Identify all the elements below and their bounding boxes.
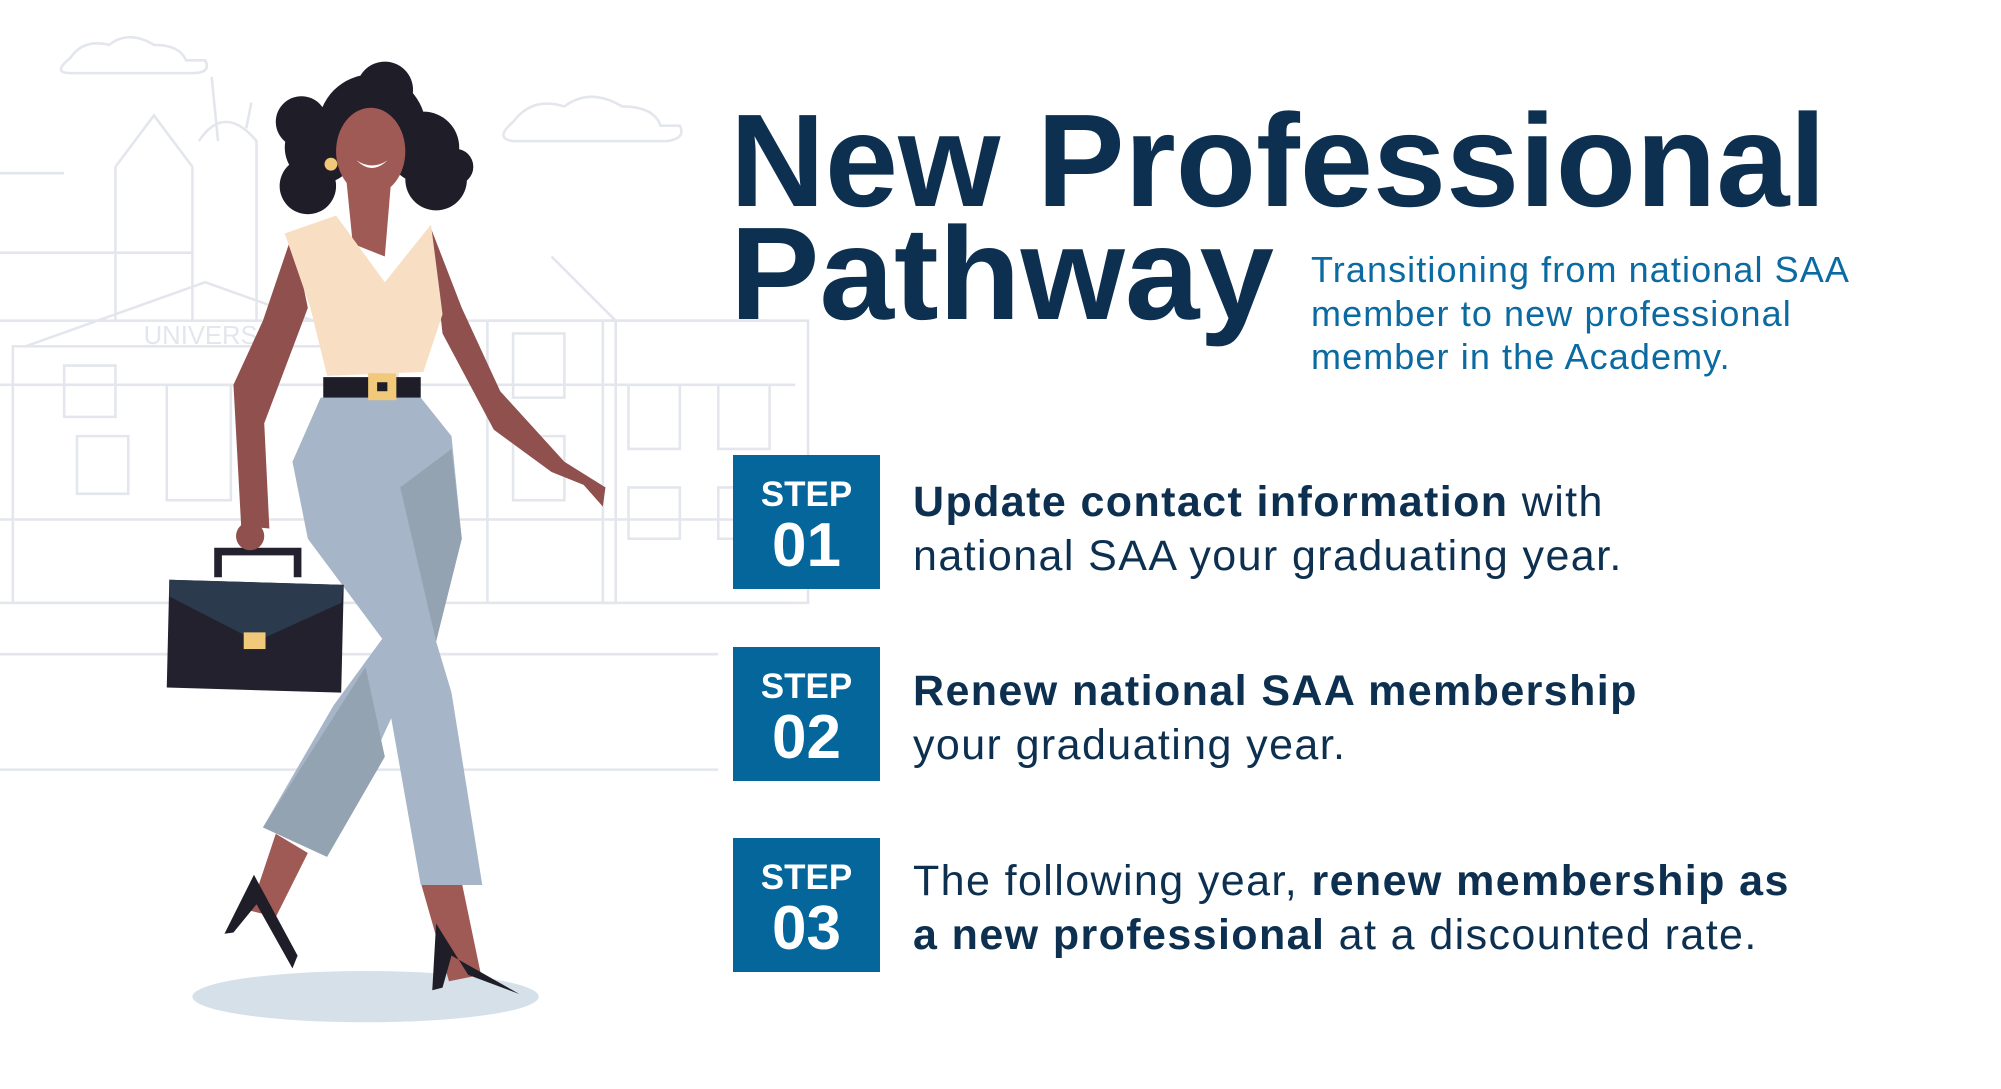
subtitle xyxy=(1311,249,1850,377)
belt xyxy=(323,377,421,398)
step 3 badge xyxy=(733,838,880,972)
briefcase xyxy=(218,552,298,577)
step 1 xyxy=(733,455,1623,589)
hair xyxy=(276,62,473,214)
pants xyxy=(263,398,482,885)
title xyxy=(730,88,1826,347)
step 1 text: national SAA your graduating year. xyxy=(913,532,1623,580)
subtitle: Transitioning from national SAA xyxy=(1311,249,1850,290)
neck xyxy=(346,180,391,257)
step 2 badge: STEP xyxy=(761,667,852,706)
step 2 text xyxy=(913,667,1638,769)
arms xyxy=(233,233,308,528)
subtitle: member to new professional xyxy=(1311,292,1792,334)
title: New Professional xyxy=(730,88,1826,234)
step 3 badge: STEP xyxy=(761,858,852,897)
background building outline xyxy=(0,37,808,770)
step 2 badge: 02 xyxy=(772,703,841,772)
step 1 badge: 01 xyxy=(772,511,841,580)
step 2 text: Renew national SAA membership xyxy=(913,667,1638,715)
step 1 badge: STEP xyxy=(761,475,852,514)
step 3 text: The following year, renew membership as xyxy=(913,857,1790,905)
step 1 text: Update contact information with xyxy=(913,478,1604,526)
step 1 text xyxy=(913,478,1623,580)
step 2 xyxy=(733,647,1638,781)
step 3 badge: 03 xyxy=(772,894,841,963)
step 2 text: your graduating year. xyxy=(913,721,1346,769)
step 3 text: a new professional at a discounted rate. xyxy=(913,911,1758,959)
background building outline: UNIVERS xyxy=(144,322,258,350)
step 3 text xyxy=(913,857,1790,959)
step 2 badge xyxy=(733,647,880,781)
subtitle: member in the Academy. xyxy=(1311,336,1731,377)
top xyxy=(285,215,443,376)
woman figure xyxy=(167,62,605,1022)
step 3 xyxy=(733,838,1790,972)
title: Pathway xyxy=(730,200,1274,347)
legs and shoes xyxy=(250,834,308,917)
step 1 badge xyxy=(733,455,880,589)
